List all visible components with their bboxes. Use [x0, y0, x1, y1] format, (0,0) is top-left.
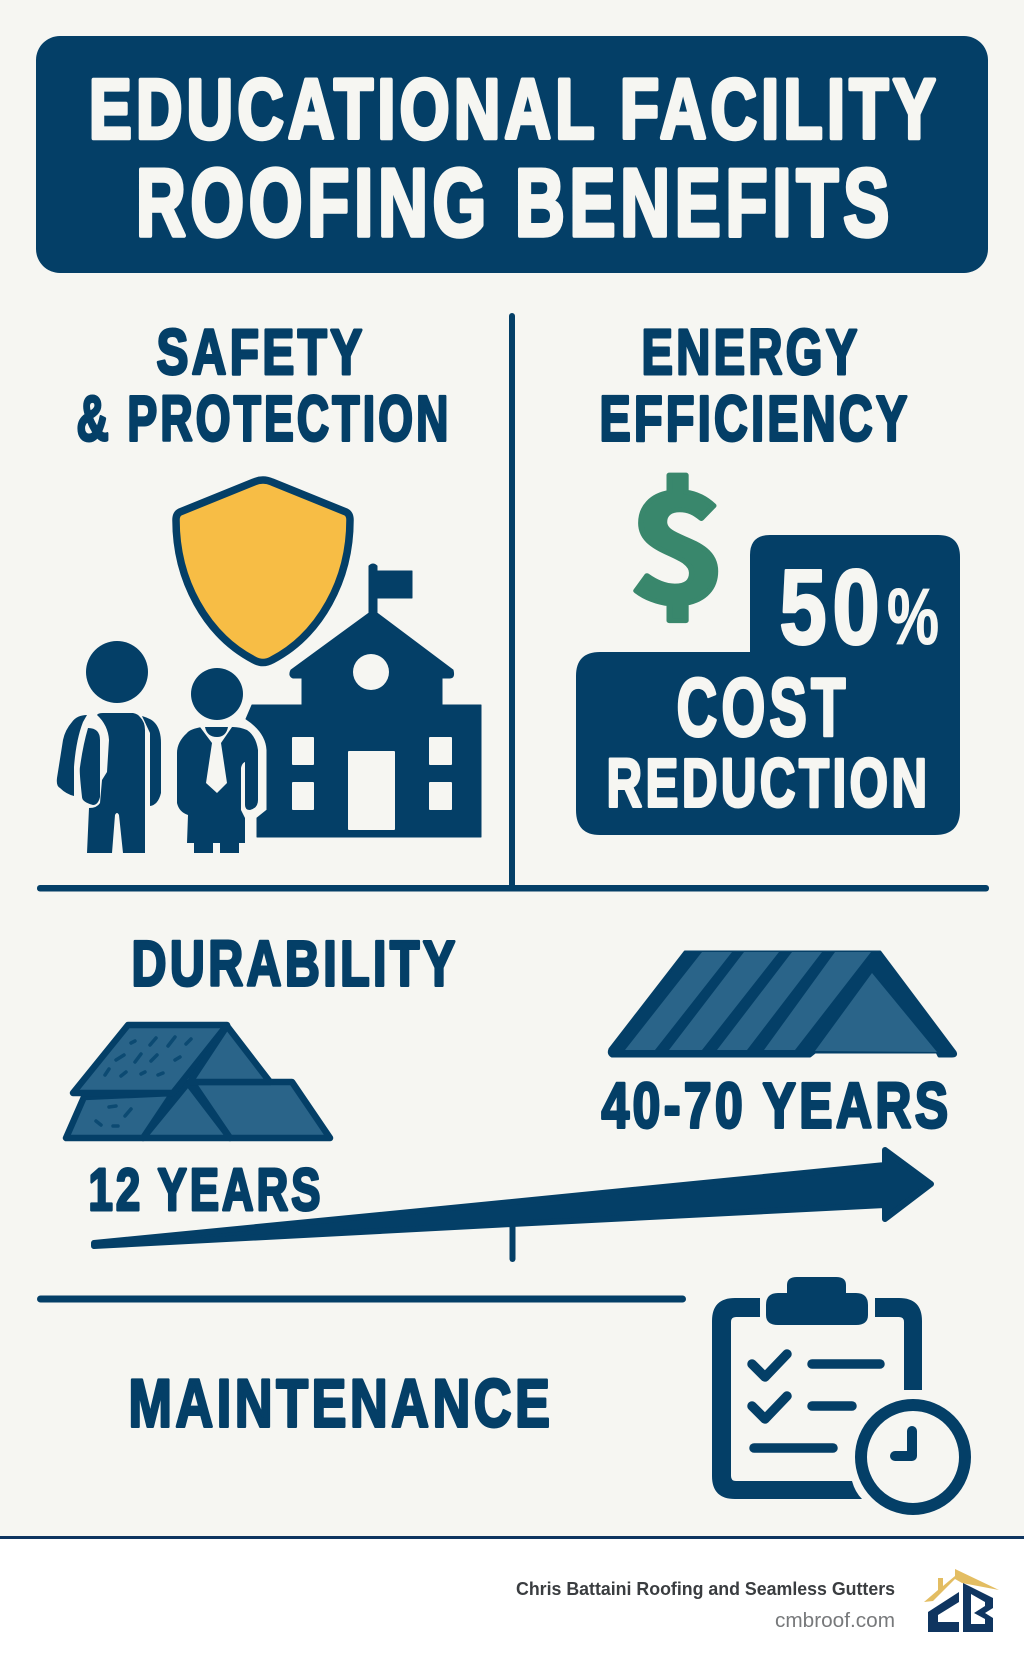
icon: student with backpack: [57, 641, 161, 853]
title banner: [36, 36, 988, 273]
icon: school building: [246, 564, 481, 837]
heading: safety and protection: SAFETY: [156, 316, 366, 388]
heading: energy efficiency: ENERGY: [642, 316, 860, 388]
arrow: lifespan increase: [94, 1150, 931, 1246]
callout: 50% cost reduction: COST: [676, 660, 850, 754]
icon: worn shingle roof: [66, 1025, 330, 1138]
footer: [0, 1536, 1024, 1666]
icon: clipboard with clock: [712, 1277, 965, 1509]
callout: 50% cost reduction: %: [887, 572, 939, 661]
heading: maintenance: MAINTENANCE: [128, 1366, 554, 1442]
heading: safety and protection: [76, 316, 452, 454]
icon: student with tie: [177, 668, 258, 853]
heading: safety and protection: & PROTECTION: [76, 382, 452, 454]
company name: Chris Battaini Roofing and Seamless Gutters: [516, 1579, 895, 1599]
panel: energy efficiency: [576, 316, 960, 835]
icon: dollar sign: $: [628, 429, 727, 646]
callout: 50% cost reduction: [576, 535, 960, 835]
logo: CB house: [924, 1569, 999, 1632]
callout: 50% cost reduction: 50: [780, 548, 886, 666]
heading: energy efficiency: EFFICIENCY: [600, 382, 910, 454]
icon: metal roof: [609, 952, 956, 1056]
website: cmbroof.com: [775, 1609, 895, 1632]
heading: energy efficiency: [600, 316, 910, 454]
heading: durability: DURABILITY: [132, 928, 458, 1000]
icon: shield: [176, 480, 350, 662]
label: 12 years: 12 YEARS: [88, 1157, 324, 1223]
panel: safety and protection: [57, 316, 481, 853]
panel: maintenance: [128, 1277, 965, 1509]
panel: durability: [66, 928, 956, 1246]
